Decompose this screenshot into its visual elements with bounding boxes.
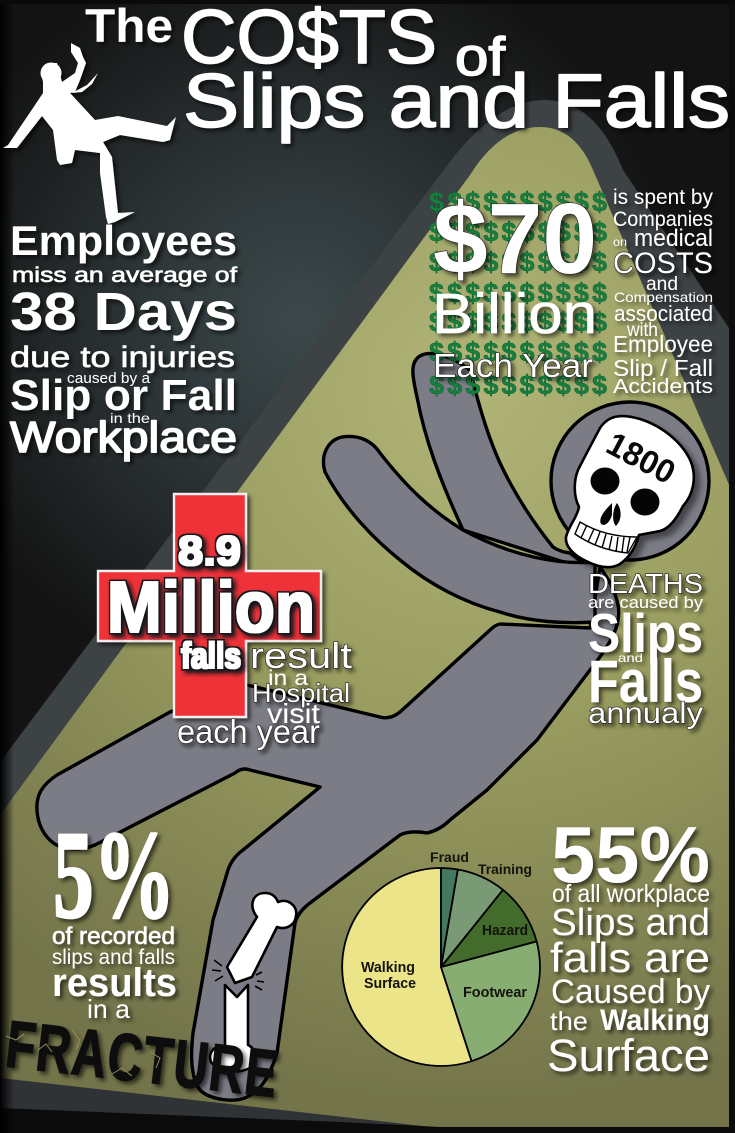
panel: 8.9 million falls xyxy=(107,527,352,750)
panel: 1800 deaths: Slips xyxy=(588,602,703,664)
cracks in letters xyxy=(6,1030,160,1076)
result in a hospital visit each year: Hospital xyxy=(252,678,350,708)
icon: red medical cross xyxy=(98,494,321,717)
panel: medical costs description xyxy=(613,186,713,398)
panel: 1800 deaths xyxy=(588,568,704,730)
panel: medical costs description: medical xyxy=(634,225,713,252)
result in a hospital visit each year: result xyxy=(250,635,352,676)
head xyxy=(40,62,62,84)
floor shadow strip xyxy=(0,1078,440,1133)
falls word: falls xyxy=(181,635,241,676)
dollar sign pattern xyxy=(429,187,607,400)
panel: 55 percent walking surface: Surface xyxy=(547,1030,710,1081)
result in a hospital visit each year: visit xyxy=(267,698,320,729)
slice: training xyxy=(441,870,503,967)
panel: 55 percent walking surface: the xyxy=(550,1006,588,1036)
panel: 70 billion each year xyxy=(432,183,597,384)
panel: employees miss 38 days: Slip or Fall xyxy=(10,371,237,420)
panel: medical costs description: Compensation xyxy=(614,289,713,305)
skull eyes xyxy=(590,468,660,526)
panel: 5 percent fractures: in a xyxy=(87,994,131,1024)
panel: employees miss 38 days: 38 Days xyxy=(10,282,237,342)
torso and legs xyxy=(37,567,619,1100)
dollar sign pattern: $$$$$$$$$$ xyxy=(429,247,607,277)
panel: employees miss 38 days: in the xyxy=(110,410,150,426)
panel: medical costs description: is spent by xyxy=(613,186,713,209)
icon: falling man silhouette xyxy=(3,43,176,224)
panel: 5 percent fractures: results xyxy=(52,961,177,1005)
slice: footwear xyxy=(441,941,540,1061)
panel: 5 percent fractures xyxy=(52,807,177,1024)
pie labels: Surface xyxy=(364,975,416,992)
panel: 70 billion each year: $70 xyxy=(433,183,597,295)
panel: 1800 deaths: and xyxy=(618,651,643,665)
slice: fraud xyxy=(441,868,458,967)
panel: medical costs description: COSTS xyxy=(613,247,713,280)
panel: medical costs description: and xyxy=(646,274,678,295)
dollar sign pattern: $$$$$$$$$$ xyxy=(429,217,607,247)
panel: 55 percent walking surface: of all workplace xyxy=(552,880,710,908)
title: of xyxy=(455,27,506,87)
pie labels: Training xyxy=(478,861,532,877)
pie chart: causes of slips and falls xyxy=(342,849,540,1066)
panel: employees miss 38 days xyxy=(10,217,237,462)
icon: skull with 1800 xyxy=(566,416,694,567)
lower bone xyxy=(210,985,255,1071)
heading: fracture: FRACTURE xyxy=(2,1008,281,1112)
lower arm xyxy=(324,436,595,623)
result in a hospital visit each year: each year xyxy=(177,713,320,750)
skull number: 1800 xyxy=(601,425,682,491)
dollar sign pattern: $$$$$$$$$$ xyxy=(429,278,607,308)
panel: medical costs description: Employee xyxy=(613,331,713,357)
body outline figure xyxy=(37,354,709,1100)
panel: 1800 deaths: are caused by xyxy=(588,593,704,612)
pie labels: Walking xyxy=(361,959,415,976)
fracture marks xyxy=(212,960,264,990)
panel: 55 percent walking surface: Caused by xyxy=(551,973,710,1011)
dollar sign pattern: $$$$$$$$$$ xyxy=(429,337,607,367)
head circle xyxy=(551,402,709,560)
result in a hospital visit each year: in a xyxy=(268,667,308,690)
pie labels: Fraud xyxy=(430,849,469,865)
panel: 1800 deaths: annualy xyxy=(588,697,703,730)
panel: employees miss 38 days: caused by a xyxy=(67,370,151,387)
pie labels xyxy=(361,849,532,1001)
panel: medical costs description: Slip / Fall xyxy=(613,355,713,381)
panel: 1800 deaths: Falls xyxy=(588,648,703,715)
panel: 70 billion each year: Billion xyxy=(432,282,597,346)
title: Slips and Falls xyxy=(183,59,730,144)
panel: 55 percent walking surface: falls are xyxy=(550,934,710,981)
panel: 55 percent walking surface xyxy=(547,810,710,1081)
tie xyxy=(72,73,98,93)
panel: 5 percent fractures: slips and falls xyxy=(52,946,175,969)
icon: broken bone xyxy=(210,893,296,1071)
panel: 55 percent walking surface: Slips and xyxy=(551,902,710,944)
panel: employees miss 38 days: due to injuries xyxy=(10,341,235,374)
million word: Million xyxy=(107,568,315,648)
slice: hazard xyxy=(441,890,537,967)
upper arm xyxy=(413,354,595,572)
panel: 5 percent fractures: 5% xyxy=(53,807,175,945)
upper bone xyxy=(227,893,296,983)
slice: walking surface xyxy=(342,868,472,1066)
panel: employees miss 38 days: Workplace xyxy=(10,413,237,462)
panel: medical costs description: with xyxy=(626,320,658,341)
panel: employees miss 38 days: Employees xyxy=(10,217,237,264)
title xyxy=(85,0,730,144)
skull teeth xyxy=(575,522,637,553)
dollar sign pattern: $$$$$$$$$$ xyxy=(429,370,607,400)
panel: 5 percent fractures: of recorded xyxy=(52,923,175,950)
panel: medical costs description: Companies xyxy=(613,208,713,231)
8.9 number: 8.9 xyxy=(178,527,241,574)
panel: 55 percent walking surface: 55% xyxy=(551,810,710,899)
panel: 1800 deaths: DEATHS xyxy=(588,568,703,599)
panel: 55 percent walking surface: Walking xyxy=(600,1004,710,1037)
panel: medical costs description: Accidents xyxy=(613,376,713,398)
pie labels: Hazard xyxy=(482,922,528,939)
dollar sign pattern: $$$$$$$$$$ xyxy=(429,187,607,217)
panel: medical costs description: associated xyxy=(614,301,713,326)
panel: medical costs description: on xyxy=(613,235,627,249)
panel: 70 billion each year: Each Year xyxy=(433,347,593,384)
pie labels: Footwear xyxy=(463,984,527,1001)
panel: employees miss 38 days: miss an average of xyxy=(12,264,237,287)
result in a hospital visit each year xyxy=(177,635,352,750)
title: The xyxy=(85,0,173,52)
dollar sign pattern: $$$$$$$$$$ xyxy=(429,307,607,337)
